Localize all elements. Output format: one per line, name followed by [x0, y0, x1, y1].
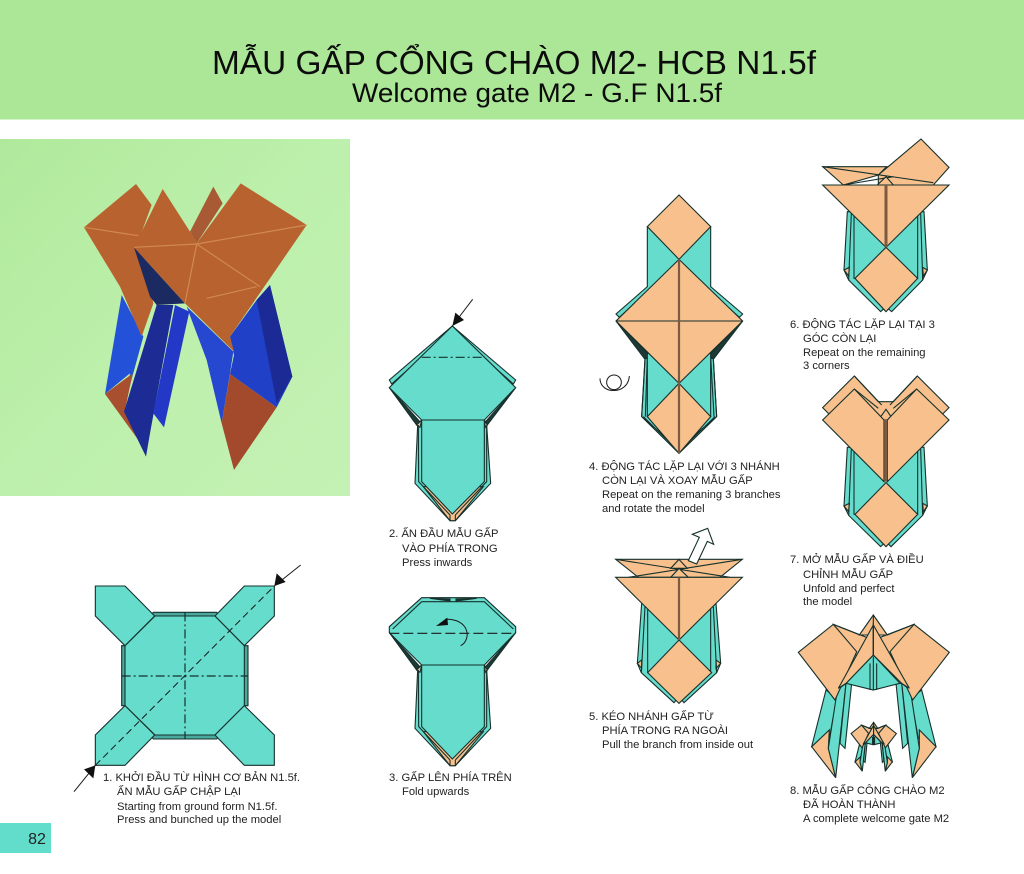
- caption: step 6: 3 corners: [803, 360, 850, 372]
- caption: step 7: [790, 553, 924, 608]
- caption: step 3: 3. GẤP LÊN PHÍA TRÊN: [389, 771, 512, 784]
- caption: step 8: A complete welcome gate M2: [803, 813, 949, 825]
- caption: step 3: Fold upwards: [402, 786, 470, 798]
- panel: finished model photo: [0, 139, 350, 496]
- caption: step 2: VÀO PHÍA TRONG: [402, 542, 498, 555]
- icon: turn over symbol: [600, 375, 629, 391]
- caption: step 7: the model: [803, 596, 852, 608]
- caption: step 1: 1. KHỞI ĐẦU TỪ HÌNH CƠ BẢN N1.5f.: [103, 771, 300, 784]
- caption: step 6: GÓC CÒN LẠI: [803, 332, 876, 345]
- step 5 diagram: pull the branch: [616, 528, 742, 703]
- icon: small gate: [851, 722, 896, 771]
- caption: step 2: [389, 527, 498, 569]
- caption: step 7: Unfold and perfect: [803, 583, 895, 595]
- caption: step 1: Starting from ground form N1.5f.: [117, 801, 277, 813]
- arrow: pull out: [688, 528, 714, 564]
- caption: step 5: Pull the branch from inside out: [602, 739, 754, 751]
- caption: step 3: [389, 771, 512, 798]
- page number: [0, 823, 51, 853]
- caption: step 5: [589, 710, 754, 751]
- caption: step 4: 4. ĐỘNG TÁC LẶP LẠI VỚI 3 NHÁNH: [589, 460, 780, 473]
- caption: step 6: 6. ĐỘNG TÁC LẶP LẠI TẠI 3: [790, 318, 935, 331]
- caption: step 8: ĐÃ HOÀN THÀNH: [803, 798, 895, 811]
- caption: step 5: PHÍA TRONG RA NGOÀI: [602, 724, 728, 737]
- caption: step 8: 8. MẪU GẤP CÔNG CHÀO M2: [790, 784, 945, 797]
- step 2 diagram: press inwards: [389, 299, 516, 521]
- step 3 diagram: fold upwards: [389, 598, 516, 766]
- step 1 diagram: ground form: [74, 565, 301, 792]
- caption: step 1: Press and bunched up the model: [117, 814, 281, 826]
- caption: step 7: CHỈNH MẪU GẤP: [803, 568, 893, 581]
- caption: step 4: and rotate the model: [602, 503, 705, 515]
- subtitle: Welcome gate M2 - G.F N1.5f: [352, 78, 723, 108]
- caption: step 5: 5. KÉO NHÁNH GẤP TỪ: [589, 710, 714, 723]
- step 8 diagram: complete welcome gate: [798, 615, 949, 778]
- page number: 82: [28, 831, 46, 848]
- caption: step 4: Repeat on the remaning 3 branches: [602, 489, 781, 501]
- title: MẪU GẤP CỔNG CHÀO M2- HCB N1.5f: [212, 44, 817, 81]
- caption: step 1: ẤN MẪU GẤP CHẬP LẠI: [117, 785, 241, 798]
- step 7 diagram: unfold and perfect: [823, 376, 949, 547]
- caption: step 2: Press inwards: [402, 557, 473, 569]
- caption: step 2: 2. ẤN ĐẦU MẪU GẤP: [389, 527, 498, 540]
- caption: step 8: [790, 784, 949, 825]
- header band: [0, 0, 1024, 120]
- caption: step 4: [589, 460, 781, 515]
- caption: step 6: Repeat on the remaining: [803, 347, 926, 359]
- icon: rotate arrow: [436, 618, 467, 646]
- caption: step 4: CÒN LẠI VÀ XOAY MẪU GẤP: [602, 474, 753, 487]
- caption: step 6: [790, 318, 935, 372]
- caption: step 1: [103, 771, 300, 826]
- caption: step 7: 7. MỞ MẪU GẤP VÀ ĐIỀU: [790, 553, 924, 566]
- step 6 diagram: repeat on corners: [823, 139, 949, 312]
- step 4 diagram: repeat and rotate: [600, 195, 743, 453]
